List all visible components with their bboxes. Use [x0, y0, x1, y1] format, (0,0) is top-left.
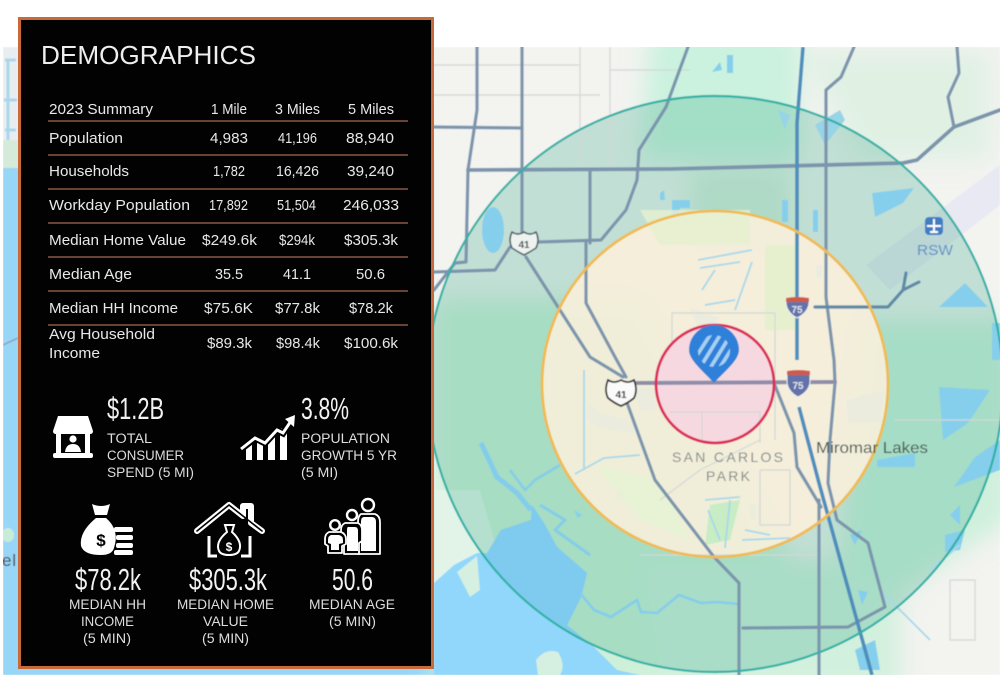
row: workday population: 246,033 — [343, 198, 399, 214]
shield: I-75 north — [786, 297, 809, 318]
icon: money bag and coins — [81, 504, 133, 555]
row: workday population: 51,504 — [277, 198, 316, 214]
stat: median hh income: MEDIAN HH — [69, 597, 146, 612]
5 mile ring — [427, 96, 1000, 672]
inland waterways — [575, 250, 960, 640]
figure: younger child — [325, 520, 346, 553]
row: median hh income: $78.2k — [349, 301, 394, 317]
stat: median hh income: INCOME — [81, 614, 134, 629]
row: median hh income: $77.8k — [275, 301, 321, 317]
table header: 2023 Summary — [49, 102, 154, 118]
roads — [434, 47, 1000, 675]
shield: I-75 south: 75 — [792, 381, 804, 392]
3 mile ring — [542, 211, 888, 557]
icon: location pin — [689, 325, 739, 383]
label: partial place name: el — [2, 551, 16, 570]
stat: median hh income: $78.2k — [75, 562, 141, 597]
row: population — [49, 131, 394, 147]
row: median age: Median Age — [49, 267, 132, 283]
figure: parent — [358, 499, 380, 554]
table header: 3 Miles — [275, 102, 320, 118]
table header — [49, 102, 394, 118]
3 mile ring fill — [542, 211, 888, 557]
row: workday population: 17,892 — [209, 198, 248, 214]
row: avg household income: Income — [49, 346, 100, 362]
icon: growth chart — [241, 415, 295, 460]
row: workday population — [49, 198, 399, 214]
stat: median age: (5 MIN) — [329, 614, 376, 629]
row: median age: 41.1 — [283, 267, 311, 283]
shield: US 41 south: 41 — [615, 390, 627, 401]
1 mile ring fill — [656, 325, 774, 443]
row: median home value: Median Home Value — [49, 233, 186, 249]
row: population: 4,983 — [210, 131, 248, 147]
shield: US 41 north: 41 — [518, 240, 530, 251]
stat: median home value: MEDIAN HOME — [177, 597, 274, 612]
water bodies — [482, 55, 1000, 670]
left strip water — [2, 47, 434, 675]
table header: 1 Mile — [211, 102, 247, 118]
panel: demographics — [20, 18, 432, 668]
land tints — [434, 30, 1000, 675]
heading: DEMOGRAPHICS — [41, 40, 256, 70]
row: population: Population — [49, 131, 123, 147]
stat: total consumer spend — [53, 391, 194, 480]
row: median hh income: Median HH Income — [49, 301, 178, 317]
label: RSW: RSW — [917, 242, 954, 259]
row: households: Households — [49, 164, 129, 180]
table header: 5 Miles — [348, 102, 394, 118]
row: avg household income: $89.3k — [207, 336, 253, 352]
stat: median age: MEDIAN AGE — [309, 597, 395, 612]
row: median home value — [49, 233, 399, 249]
stat: median hh income — [69, 504, 146, 646]
shield: I-75 north: 75 — [791, 305, 803, 316]
row: median age: 35.5 — [215, 267, 243, 283]
row: population: 41,196 — [278, 131, 317, 147]
row: population: 88,940 — [346, 131, 394, 147]
airport runway band — [902, 166, 1000, 278]
icon: house with money bag: $ — [226, 540, 233, 554]
label: San Carlos Park — [672, 452, 783, 482]
stat: total consumer spend: SPEND (5 MI) — [107, 465, 194, 480]
1 mile ring — [656, 325, 774, 443]
row: median hh income — [49, 301, 394, 317]
islands — [457, 556, 563, 675]
stat: total consumer spend: TOTAL — [107, 431, 153, 446]
row: households: 1,782 — [213, 164, 245, 180]
stat: median home value: $305.3k — [189, 562, 267, 597]
stat: population growth — [241, 391, 397, 480]
table: 2023 summary — [48, 102, 408, 362]
stat: population growth: GROWTH 5 YR — [301, 448, 397, 463]
stat: median age — [309, 499, 395, 629]
open water outside ring — [434, 552, 639, 675]
stat: population growth: 3.8% — [301, 391, 349, 426]
figure: older child — [341, 510, 362, 554]
shield: I-75 south — [787, 370, 810, 397]
stat: median hh income: (5 MIN) — [83, 631, 131, 646]
label: San Carlos Park: PARK — [706, 468, 751, 484]
icon: airport — [925, 217, 943, 235]
3 mile ring land detail — [618, 209, 795, 545]
row: median hh income: $75.6K — [204, 301, 253, 317]
row: avg household income: $100.6k — [344, 336, 399, 352]
left land outside ring — [438, 490, 494, 578]
row: median home value: $249.6k — [202, 233, 258, 249]
row: households — [49, 164, 394, 180]
row: households: 39,240 — [347, 164, 394, 180]
icon: house with money bag — [197, 505, 262, 556]
row: avg household income — [49, 327, 399, 362]
row: workday population: Workday Population — [49, 198, 190, 214]
thin local streets — [430, 47, 1000, 640]
row: median home value: $294k — [279, 233, 316, 249]
icon: market stall — [53, 416, 93, 458]
5 mile ring fill — [427, 96, 1000, 672]
row: median age — [49, 267, 385, 283]
interstate 75 — [797, 47, 872, 675]
bay inside ring — [478, 442, 738, 638]
row: avg household income: Avg Household — [49, 327, 155, 343]
stat: median age: 50.6 — [332, 562, 373, 597]
label: San Carlos Park: SAN CARLOS — [672, 449, 783, 465]
stat: median home value — [177, 505, 274, 646]
icon: money bag and coins: $ — [96, 531, 106, 550]
row: median home value: $305.3k — [344, 233, 399, 249]
row: households: 16,426 — [276, 164, 319, 180]
stat: total consumer spend: $1.2B — [107, 391, 164, 426]
icon: family — [325, 499, 380, 554]
label: Miromar Lakes: Miromar Lakes — [816, 440, 928, 457]
stat: population growth: POPULATION — [301, 431, 390, 446]
stat: median home value: (5 MIN) — [202, 631, 249, 646]
stat: median home value: VALUE — [203, 614, 248, 629]
stat: total consumer spend: CONSUMER — [107, 448, 184, 463]
row: median age: 50.6 — [356, 267, 385, 283]
row: avg household income: $98.4k — [276, 336, 321, 352]
stat: population growth: (5 MI) — [301, 465, 338, 480]
shield: US 41 south — [606, 380, 636, 406]
shield: US 41 north — [510, 232, 538, 255]
